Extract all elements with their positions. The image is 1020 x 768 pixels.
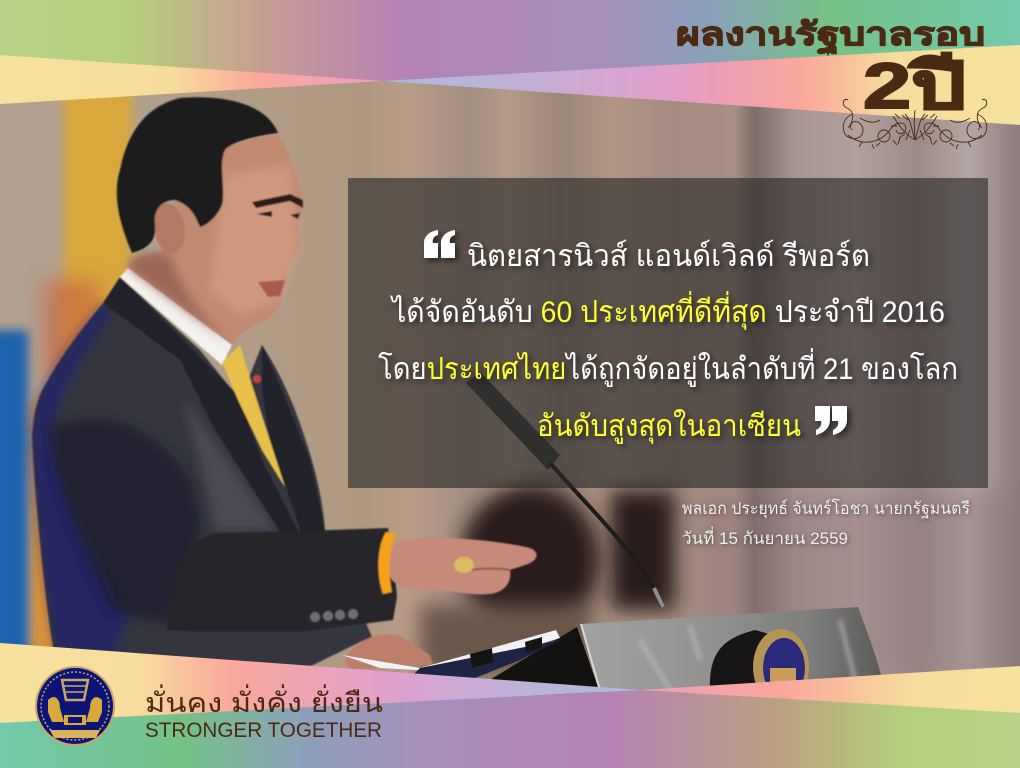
ornament flourish: [843, 99, 987, 149]
neck and face: [128, 135, 304, 345]
quote line 4: อันดับสูงสุดในอาเซียน: [537, 409, 801, 445]
shirt collar: [120, 268, 232, 365]
title: 2 years: 2ปี: [863, 50, 966, 122]
bottom colour band: [0, 643, 1020, 768]
lips: [258, 280, 285, 297]
attribution: name and date: วันที่ 15 กันยายน 2559: [682, 526, 848, 548]
attribution: name and date: พลเอก ประยุทธ์ จันทร์โอชา นายกรัฐมนตรี: [682, 498, 970, 519]
closing quote mark: [815, 406, 847, 435]
quote line 1: นิตยสารนิวส์ แอนด์เวิลด์ รีพอร์ต: [467, 239, 870, 273]
orange wristband: [378, 532, 397, 594]
face highlight: [210, 165, 298, 315]
hand: [386, 538, 537, 594]
jacket body: [32, 277, 372, 668]
podium: [473, 607, 884, 705]
sleeve buttons: [310, 609, 358, 622]
ear: [152, 203, 185, 253]
podium seal: [710, 630, 790, 692]
quote line 3: โดยประเทศไทยได้ถูกจัดอยู่ในลำดับที่ 21 ของโลก: [378, 348, 958, 387]
finger shadow: [470, 568, 510, 570]
ring: [454, 557, 474, 573]
top colour band: [0, 0, 1020, 125]
eyebrows and eyes: [252, 194, 303, 208]
slogan: English: STRONGER TOGETHER: [145, 719, 382, 742]
presenter figure: Prime Minister at podium: [32, 97, 537, 670]
government seal: [35, 666, 115, 746]
lower hand on papers: [345, 634, 433, 670]
seal lions: [48, 697, 64, 722]
title: government achievements: ผลงานรัฐบาลรอบ: [676, 16, 985, 55]
attribution: name and date: [682, 498, 970, 548]
papers and clipboard: [342, 630, 560, 680]
tie: [222, 345, 285, 487]
opening quote mark: [424, 230, 455, 258]
microphone: [466, 372, 663, 607]
forearm sleeve: [167, 528, 397, 632]
quote line 2: ได้จัดอันดับ 60 ประเทศที่ดีที่สุด ประจำปี 2016: [390, 291, 945, 331]
lapel pin: [253, 375, 261, 383]
slogan: Thai: มั่นคง มั่งคั่ง ยั่งยืน: [145, 684, 383, 718]
seal urn: [62, 680, 88, 700]
seal base: [64, 715, 86, 725]
quote text block: [378, 230, 958, 445]
quote panel: [348, 178, 988, 488]
hair: [117, 97, 278, 253]
neck shadow: [128, 253, 232, 345]
lapel: [103, 277, 300, 535]
